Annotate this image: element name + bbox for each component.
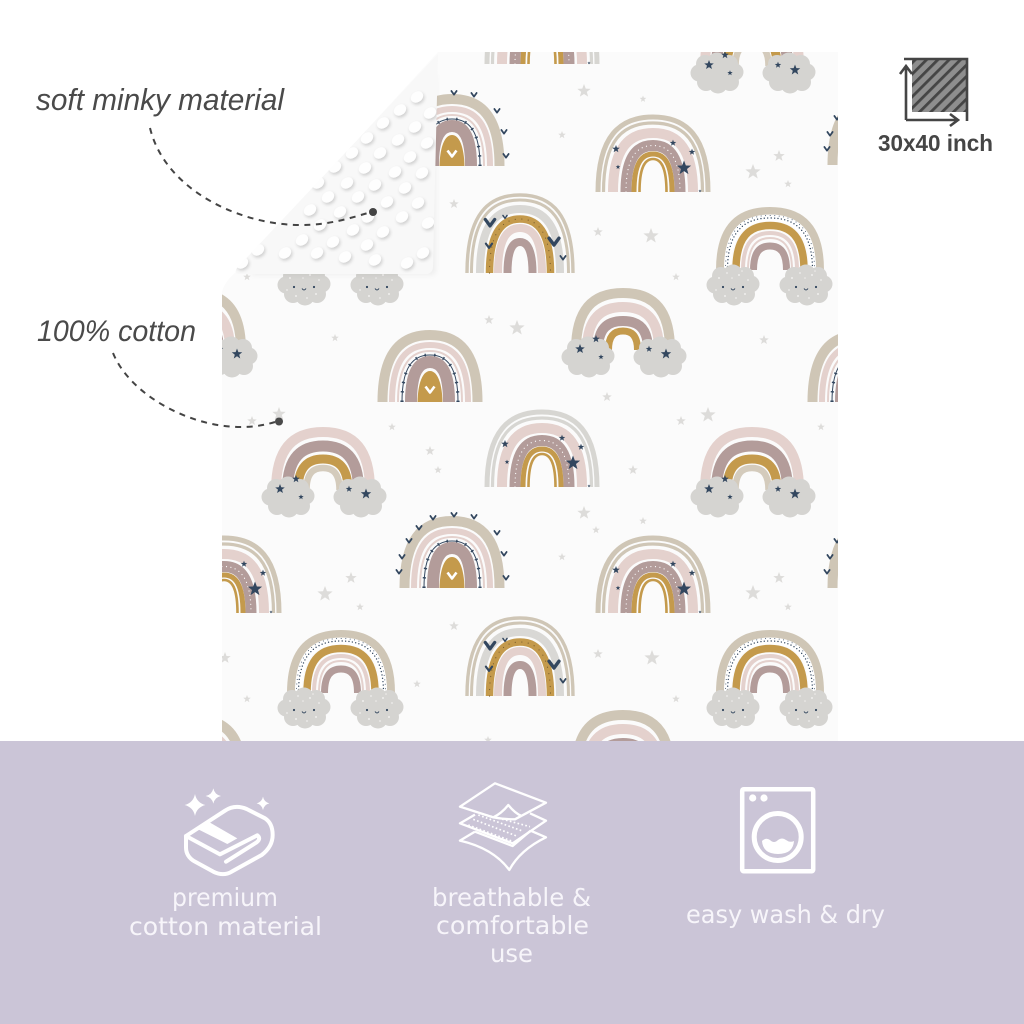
star scatter on blanket [219,84,825,743]
blanket [222,52,838,741]
label: premium cotton material: cotton material [129,912,322,941]
feature band [0,741,1024,1024]
label: breathable and comfortable use: comfortable [436,911,589,940]
label: breathable and comfortable use: use [490,939,533,968]
rainbow row 1 [435,52,838,192]
icon: washing machine [742,789,813,871]
feature: premium cotton [129,788,322,941]
rainbow row 4 [222,616,832,741]
callout: soft minky material: soft minky material [36,83,285,117]
size icon [900,59,967,126]
label: easy wash and dry: easy wash & dry [686,900,885,929]
folded minky corner [236,92,437,274]
rainbows [222,52,838,815]
icon: layered fabric [460,783,546,870]
feature: breathable [432,783,591,968]
icon: folded towel with sparkles [185,788,273,874]
label: breathable and comfortable use: breathable & [432,883,591,912]
label: premium cotton material: premium [172,883,278,912]
size label: 30x40 inch [878,130,993,156]
feature: easy wash [686,789,885,929]
callout: 100% cotton [37,315,283,427]
rainbow row 3 [222,410,838,614]
callout: 100% cotton: 100% cotton [37,315,196,348]
callout: soft minky material [36,83,377,225]
rainbow row 2 [222,193,838,402]
